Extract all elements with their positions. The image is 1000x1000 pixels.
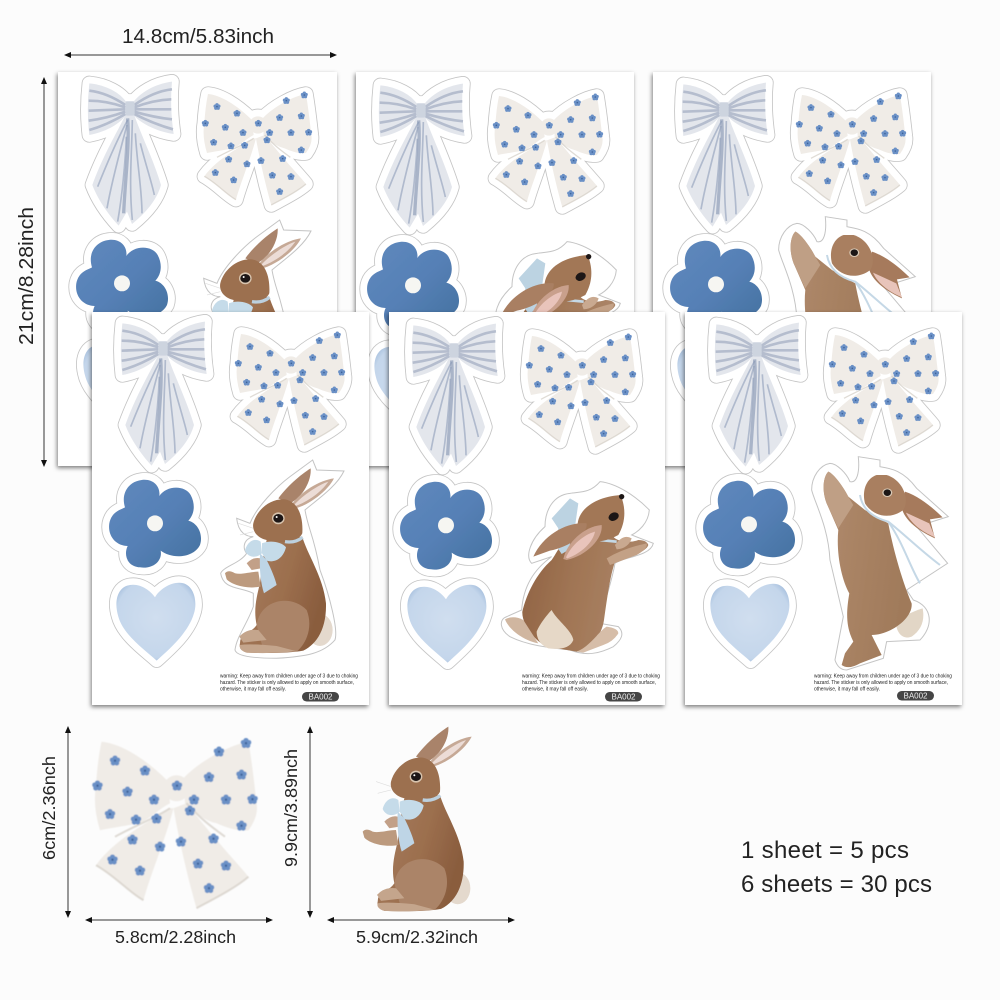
large polka bow	[92, 738, 258, 908]
back sheet 1	[58, 72, 337, 466]
warning text	[220, 674, 358, 692]
rabbit width label: 5.9cm/2.32inch	[356, 927, 478, 947]
bow height label: 6cm/2.36nch	[39, 756, 59, 860]
rabbit height label: 9.9cm/3.89nch	[281, 749, 301, 867]
height label: 21cm/8.28inch	[16, 207, 38, 345]
bow width arrow	[85, 917, 273, 923]
code pill	[605, 692, 642, 702]
rabbit height arrow	[307, 726, 313, 918]
bow height arrow	[65, 726, 71, 918]
back sheet 3	[653, 72, 931, 466]
stickers: bows, flower, heart	[400, 324, 636, 663]
code pill	[302, 692, 339, 702]
height dimension arrow	[41, 77, 47, 467]
rabbit sticker hopping	[501, 482, 653, 654]
front sheet 2	[389, 312, 665, 705]
warning text	[522, 674, 660, 692]
rabbit sticker sitting	[221, 460, 344, 658]
front sheet 3	[685, 312, 962, 705]
stickers: bows, flower, heart	[109, 322, 345, 661]
front sheet 1	[92, 312, 369, 705]
rabbit sticker stretching	[812, 457, 948, 670]
quantity note: 6 sheets = 30 pcs	[741, 871, 932, 898]
width dimension arrow	[64, 52, 337, 58]
warning text	[814, 674, 952, 692]
stickers: bows, flower, heart	[703, 323, 939, 662]
code pill	[897, 691, 934, 701]
bow width label: 5.8cm/2.28inch	[115, 927, 236, 947]
large rabbit	[363, 727, 472, 911]
rabbit width arrow	[327, 917, 515, 923]
quantity note	[741, 837, 932, 898]
width label: 14.8cm/5.83inch	[122, 26, 274, 48]
quantity note: 1 sheet = 5 pcs	[741, 837, 909, 864]
back sheet 2	[356, 72, 634, 466]
